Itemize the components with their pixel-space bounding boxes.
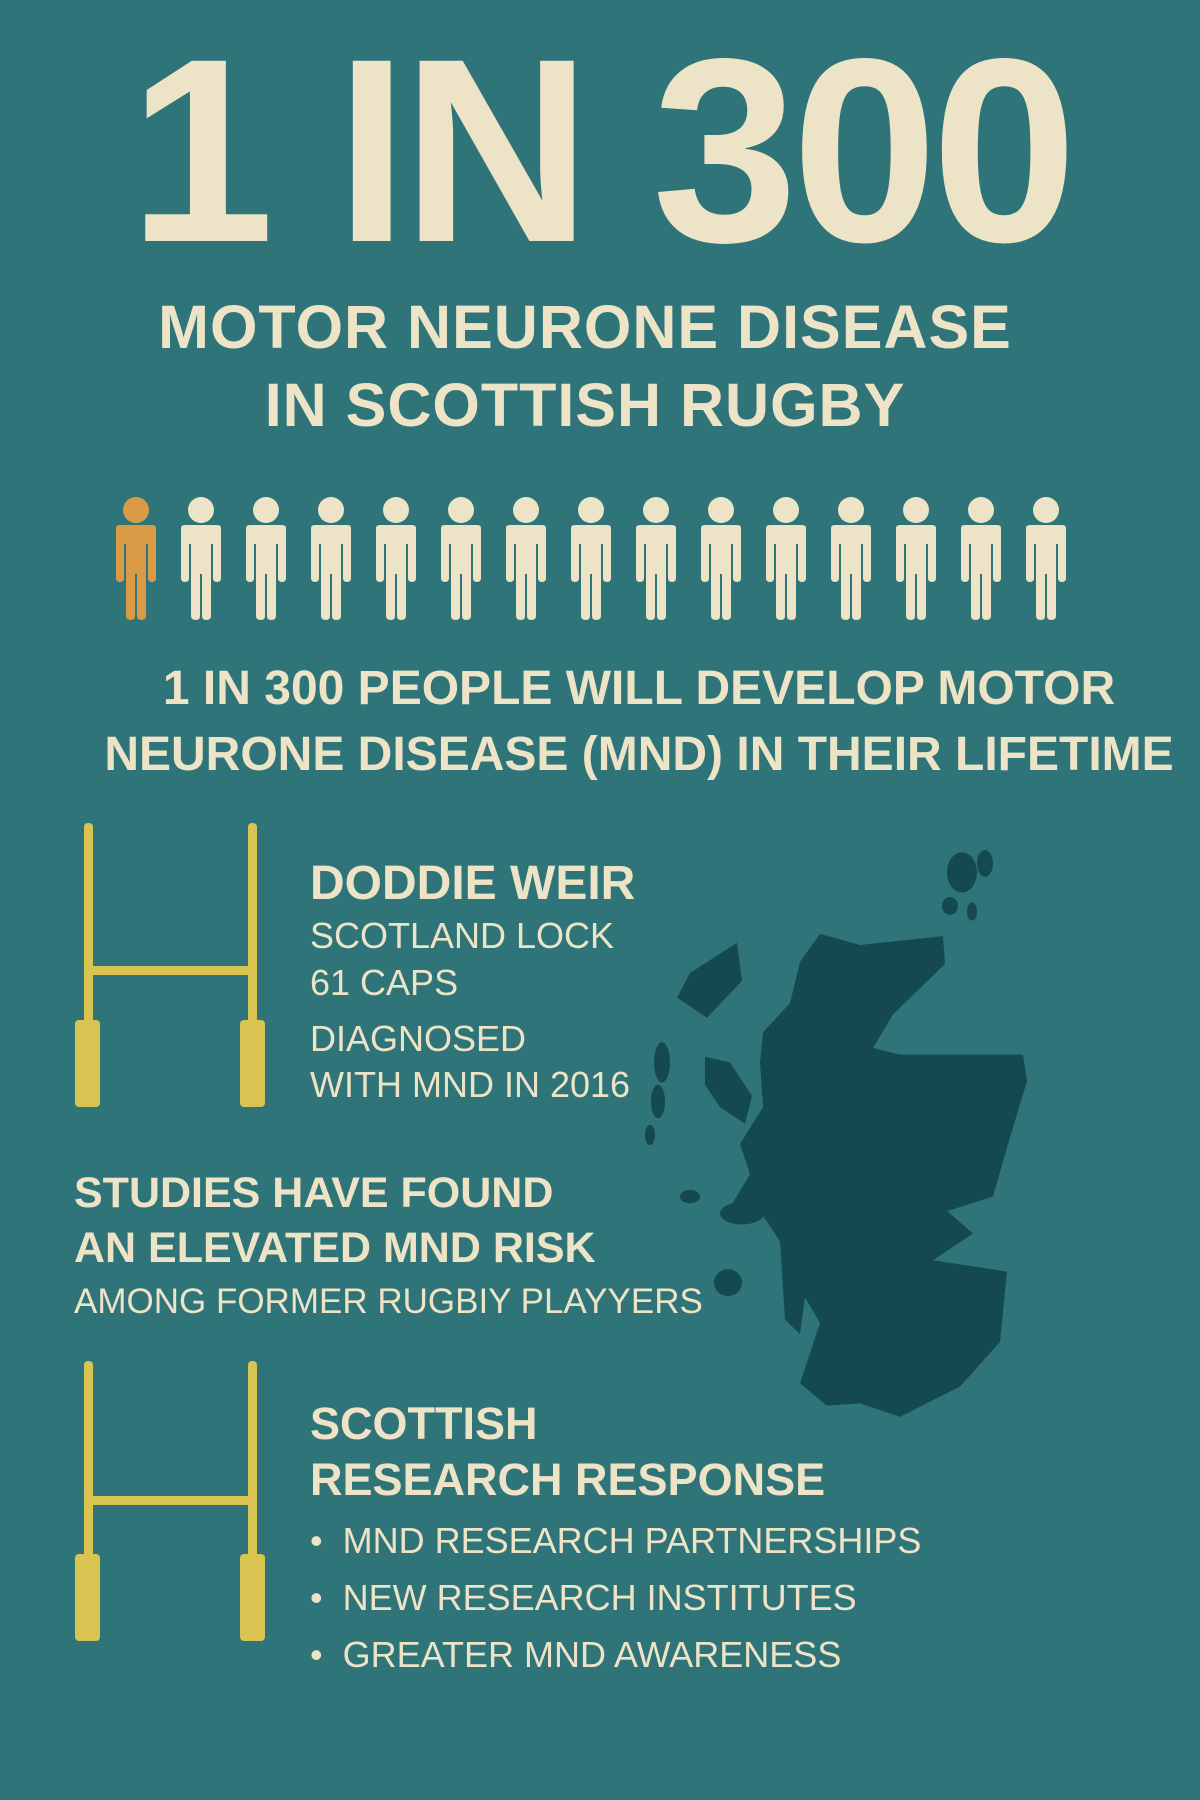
text: Doddie Weir: WITH MND IN 2016: [310, 1064, 630, 1105]
text: Doddie Weir: [310, 857, 635, 1105]
caption: NEURONE DISEASE (MND) IN THEIR LIFETIME: [104, 728, 1174, 781]
text: studies: AMONG FORMER RUGBIY PLAYYERS: [74, 1282, 703, 1321]
caption: 1 IN 300 PEOPLE WILL DEVELOP MOTOR: [163, 662, 1115, 715]
text: Doddie Weir: 61 CAPS: [310, 962, 458, 1003]
icon: goalpost 1: [75, 823, 265, 1107]
text: research response: • MND RESEARCH PARTNERSHIPS: [310, 1520, 921, 1561]
text: studies: [74, 1169, 703, 1321]
text: Doddie Weir: DIAGNOSED: [310, 1018, 526, 1059]
text: research response: SCOTTISH: [310, 1398, 538, 1449]
subtitle: [158, 293, 1012, 439]
caption: [104, 662, 1174, 781]
subtitle: MOTOR NEURONE DISEASE: [158, 293, 1012, 361]
subtitle: IN SCOTTISH RUGBY: [265, 371, 905, 439]
text: research response: RESEARCH RESPONSE: [310, 1454, 825, 1505]
text: Doddie Weir: DODDIE WEIR: [310, 857, 635, 910]
text: studies: AN ELEVATED MND RISK: [74, 1224, 596, 1272]
text: Doddie Weir: SCOTLAND LOCK: [310, 915, 614, 956]
icon: goalpost 2: [75, 1361, 265, 1641]
text: research response: • GREATER MND AWARENESS: [310, 1634, 841, 1675]
title: 1 IN 300: [129, 4, 1071, 297]
text: research response: • NEW RESEARCH INSTITUTES: [310, 1577, 857, 1618]
text: studies: STUDIES HAVE FOUND: [74, 1169, 553, 1217]
text: research response: [310, 1398, 921, 1675]
